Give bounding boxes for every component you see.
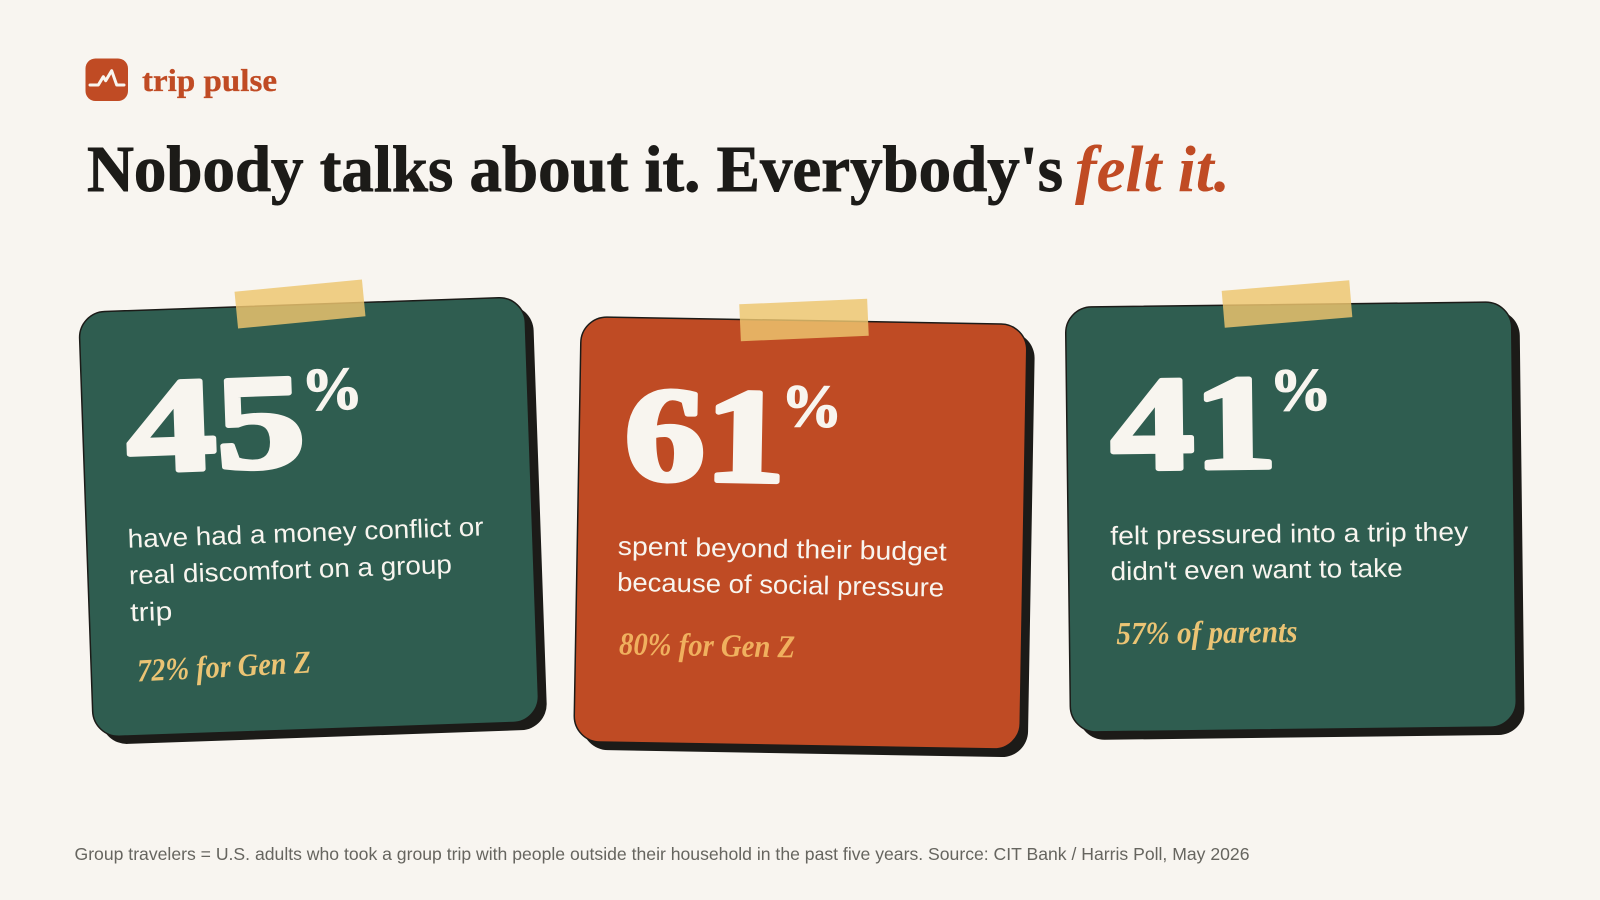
stat number: 41: [1110, 348, 1278, 498]
description: [127, 511, 487, 627]
panel: 61% card: [574, 317, 1035, 758]
footnote: Group travelers = U.S. adults who took a group trip with people outside their household in the past five years. Source: CIT Bank / Harris Poll, May 2026: [74, 844, 1250, 864]
description: real discomfort on a group: [128, 549, 452, 590]
panel: 41% card: [1065, 302, 1525, 740]
description: have had a money conflict or: [127, 511, 484, 554]
card shadow: [582, 325, 1035, 758]
title: Nobody talks about it. Everybody's: [87, 133, 1063, 206]
tape: card one: [235, 279, 365, 329]
percent sign: %: [1269, 356, 1332, 423]
tape: card three: [1222, 280, 1352, 328]
description: because of social pressure: [617, 567, 944, 603]
percent sign: %: [781, 373, 843, 440]
description: felt pressured into a trip they: [1110, 516, 1468, 551]
description: trip: [130, 596, 173, 627]
title emphasis: felt it.: [1075, 133, 1230, 206]
handwritten note: 72% for Gen Z: [136, 643, 312, 689]
stat number: 45: [124, 347, 307, 501]
card body: [574, 317, 1027, 749]
icon: pulse badge: [86, 58, 128, 101]
description: spent beyond their budget: [617, 531, 948, 567]
description: didn't even want to take: [1110, 553, 1403, 586]
card body: [79, 297, 539, 737]
percent sign: %: [300, 355, 364, 423]
description: [617, 531, 948, 603]
card shadow: [1074, 310, 1525, 740]
stat number: 61: [623, 360, 787, 511]
brand name: trip pulse: [142, 62, 277, 98]
handwritten note: 80% for Gen Z: [619, 625, 795, 664]
handwritten note: 57% of parents: [1116, 613, 1298, 651]
card shadow: [87, 305, 548, 745]
brand logo: [86, 58, 277, 101]
card body: [1065, 302, 1517, 732]
panel: 45% card: [79, 297, 548, 745]
description: [1110, 516, 1469, 586]
tape: card two: [739, 299, 869, 341]
